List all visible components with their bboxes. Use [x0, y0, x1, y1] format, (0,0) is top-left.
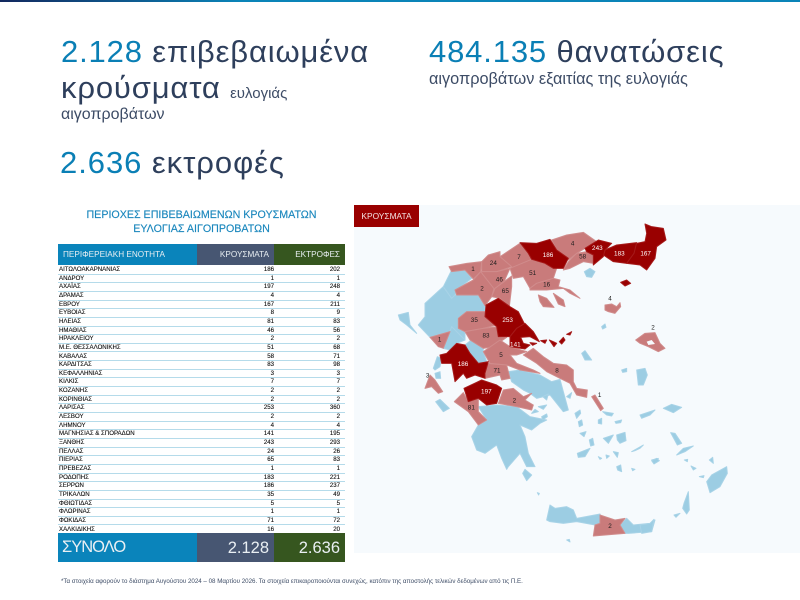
table rows: 141 [264, 430, 274, 437]
table rows: ΚΑΡΔΙΤΣΑΣ [59, 361, 92, 368]
table rows: ΗΛΕΙΑΣ [59, 318, 81, 325]
table rows: ΑΧΑΪΑΣ [59, 283, 81, 290]
table rows: ΑΙΤΩΛΟΑΚΑΡΝΑΝΙΑΣ [59, 266, 120, 273]
table rows: 2 [271, 335, 274, 342]
table rows: ΦΛΩΡΙΝΑΣ [59, 508, 90, 515]
table rows: ΚΙΛΚΙΣ [59, 378, 78, 385]
table rows: ΚΑΒΑΛΑΣ [59, 352, 87, 360]
table rows: 56 [333, 327, 340, 334]
table rows: ΦΩΚΙΔΑΣ [59, 517, 86, 524]
table rows: ΕΒΡΟΥ [59, 301, 80, 308]
table rows: 51 [267, 344, 274, 351]
table rows: 1 [271, 275, 274, 282]
top gradient bar [0, 0, 800, 2]
map value labels: 2 [480, 286, 484, 293]
table rows: ΠΙΕΡΙΑΣ [59, 456, 83, 463]
map value labels: 4 [608, 295, 612, 302]
table header: ΕΚΤΡΟΦΕΣ [295, 250, 340, 259]
table rows: 186 [264, 482, 274, 489]
map value labels: 1 [438, 337, 442, 344]
table rows: 4 [337, 422, 340, 429]
table rows: 211 [330, 301, 340, 308]
map value labels: 186 [543, 252, 554, 259]
table rows: ΗΡΑΚΛΕΙΟΥ [59, 335, 94, 342]
map value labels: 1 [471, 266, 475, 273]
footnote: *Τα στοιχεία αφορούν το διάστημα Αυγούστου 2024 – 08 Μαρτίου 2026. Τα στοιχεία επικαιροποιούνται συνεχώς, κατόπιν της αποστολής τελικών δεδομένων από τις Π.Ε. [61, 578, 523, 585]
table rows: 237 [330, 482, 340, 489]
stat: confirmed cases [61, 34, 369, 123]
stat: culled animals: αιγοπροβάτων εξαιτίας της ευλογιάς [429, 70, 688, 88]
map value labels: 2 [651, 325, 655, 332]
table rows: ΞΑΝΘΗΣ [59, 439, 84, 446]
table totals: 2.128 [228, 538, 269, 556]
table totals [58, 533, 345, 562]
table rows: 4 [271, 422, 274, 429]
stat: farms: 2.636 εκτροφές [60, 145, 285, 180]
table rows: ΚΟΡΙΝΘΙΑΣ [59, 396, 92, 403]
table rows: 68 [333, 344, 340, 351]
table rows: 2 [337, 396, 340, 403]
table rows: ΛΗΜΝΟΥ [59, 422, 86, 429]
table rows: 9 [337, 309, 340, 316]
map value labels: 253 [502, 317, 513, 324]
table header [58, 244, 345, 265]
table rows: ΤΡΙΚΑΛΩΝ [59, 491, 90, 498]
map legend label: ΚΡΟΥΣΜΑΤΑ [361, 211, 412, 221]
map value labels: 83 [482, 332, 490, 339]
table rows: 72 [333, 517, 340, 524]
table header: ΠΕΡΙΦΕΡΕΙΑΚΗ ΕΝΟΤΗΤΑ [63, 250, 165, 259]
table rows: ΛΕΣΒΟΥ [59, 413, 84, 420]
table rows: 221 [330, 474, 340, 481]
table rows: 1 [271, 465, 274, 472]
table rows: 293 [330, 439, 340, 446]
map value labels: 71 [493, 367, 501, 374]
table header: ΚΡΟΥΣΜΑΤΑ [220, 250, 269, 259]
table rows: 253 [264, 404, 274, 411]
map value labels: 183 [614, 251, 625, 258]
table rows: 35 [267, 491, 274, 498]
table rows: ΗΜΑΘΙΑΣ [59, 327, 87, 334]
table rows: 49 [333, 491, 340, 498]
table rows: 2 [337, 335, 340, 342]
table rows: Μ.Ε. ΘΕΣΣΑΛΟΝΙΚΗΣ [59, 344, 121, 351]
map value labels: 51 [529, 270, 537, 277]
table heading [86, 209, 317, 235]
table rows: 81 [267, 318, 274, 325]
table [58, 244, 345, 562]
table rows: 167 [264, 301, 274, 308]
map value labels: 141 [510, 341, 521, 348]
table rows: ΠΕΛΛΑΣ [59, 448, 83, 455]
table rows: 58 [267, 352, 274, 360]
map value labels: 7 [517, 254, 521, 261]
table rows: 243 [264, 439, 274, 446]
table rows: 98 [333, 361, 340, 368]
table rows: 83 [333, 318, 340, 325]
table rows: ΚΟΖΑΝΗΣ [59, 387, 88, 394]
table rows: 197 [264, 283, 274, 290]
table rows: 186 [264, 266, 274, 273]
map value labels [426, 241, 655, 530]
table rows: 65 [267, 456, 274, 463]
table rows: 248 [330, 283, 340, 290]
map legend label [354, 205, 419, 227]
stat: culled animals [429, 34, 724, 88]
map value labels: 35 [471, 317, 478, 324]
table rows: 360 [330, 404, 340, 411]
table rows: 16 [267, 526, 274, 532]
map value labels: 4 [571, 241, 575, 248]
table rows: 26 [333, 448, 340, 455]
table rows: 5 [271, 500, 274, 507]
table rows: 202 [330, 266, 340, 273]
map value labels: 197 [481, 389, 492, 396]
table rows: 20 [333, 526, 340, 532]
table rows: ΚΕΦΑΛΛΗΝΙΑΣ [59, 370, 102, 377]
table rows: 1 [337, 508, 340, 515]
table rows: 2 [271, 387, 274, 394]
map value labels: 5 [499, 352, 503, 359]
map value labels: 167 [640, 250, 651, 257]
table rows: 195 [330, 430, 340, 437]
table rows: ΧΑΛΚΙΔΙΚΗΣ [59, 526, 95, 532]
table rows: ΡΟΔΟΠΗΣ [59, 474, 89, 481]
stat: confirmed cases: αιγοπροβάτων [61, 106, 165, 123]
table rows: 83 [267, 361, 274, 368]
table rows: 7 [337, 378, 340, 385]
table rows: 1 [337, 275, 340, 282]
table rows: ΣΕΡΡΩΝ [59, 482, 84, 489]
map value labels: 81 [468, 405, 475, 412]
table rows: ΛΑΡΙΣΑΣ [59, 404, 84, 411]
table rows: 4 [337, 292, 340, 299]
panel: map background [354, 205, 800, 553]
table rows: 4 [271, 292, 274, 299]
table rows: ΜΑΓΝΗΣΙΑΣ & ΣΠΟΡΑΔΩΝ [59, 430, 135, 437]
table rows: 2 [271, 413, 274, 420]
map value labels: 65 [502, 288, 509, 295]
table totals: 2.636 [299, 538, 340, 556]
map value labels: 8 [555, 367, 559, 374]
table heading: ΕΥΛΟΓΙΑΣ ΑΙΓΟΠΡΟΒΑΤΩΝ [133, 223, 270, 235]
map value labels: 1 [598, 392, 602, 399]
table rows: 2 [271, 396, 274, 403]
table rows: 71 [333, 352, 340, 360]
table rows: 71 [267, 517, 274, 524]
map value labels: 186 [458, 361, 469, 368]
table rows: 3 [271, 370, 274, 377]
table rows: ΦΘΙΩΤΙΔΑΣ [59, 500, 92, 507]
table heading: ΠΕΡΙΟΧΕΣ ΕΠΙΒΕΒΑΙΩΜΕΝΩΝ ΚΡΟΥΣΜΑΤΩΝ [86, 209, 317, 221]
table rows: ΠΡΕΒΕΖΑΣ [59, 465, 91, 472]
table rows: 7 [271, 378, 274, 385]
table rows: 83 [333, 456, 340, 463]
table rows [58, 266, 345, 532]
table rows: ΕΥΒΟΙΑΣ [59, 309, 85, 316]
map value labels: 243 [592, 245, 603, 252]
table rows: 2 [337, 413, 340, 420]
map value labels: 16 [543, 281, 551, 288]
map value labels: 2 [608, 523, 612, 530]
map value labels: 3 [426, 372, 430, 379]
map value labels: 46 [496, 277, 503, 284]
table rows: ΑΝΔΡΟΥ [59, 275, 84, 282]
stat: confirmed cases: κρούσματα ευλογιάς [61, 70, 287, 105]
table rows: 3 [337, 370, 340, 377]
stat: culled animals: 484.135 θανατώσεις [429, 34, 724, 69]
table rows: 183 [264, 474, 274, 481]
table rows: 1 [271, 508, 274, 515]
table rows: 2 [337, 387, 340, 394]
map value labels: 24 [490, 260, 497, 267]
table rows: 8 [271, 309, 274, 316]
map value labels: 58 [579, 253, 587, 260]
table rows: 46 [267, 327, 274, 334]
table rows: 1 [337, 465, 340, 472]
table rows: 5 [337, 500, 340, 507]
map value labels: 2 [513, 397, 517, 404]
table totals: ΣΥΝΟΛΟ [62, 538, 125, 556]
stat: confirmed cases: 2.128 επιβεβαιωμένα [61, 34, 369, 69]
table rows: ΔΡΑΜΑΣ [59, 292, 84, 299]
table rows: 24 [267, 448, 274, 455]
